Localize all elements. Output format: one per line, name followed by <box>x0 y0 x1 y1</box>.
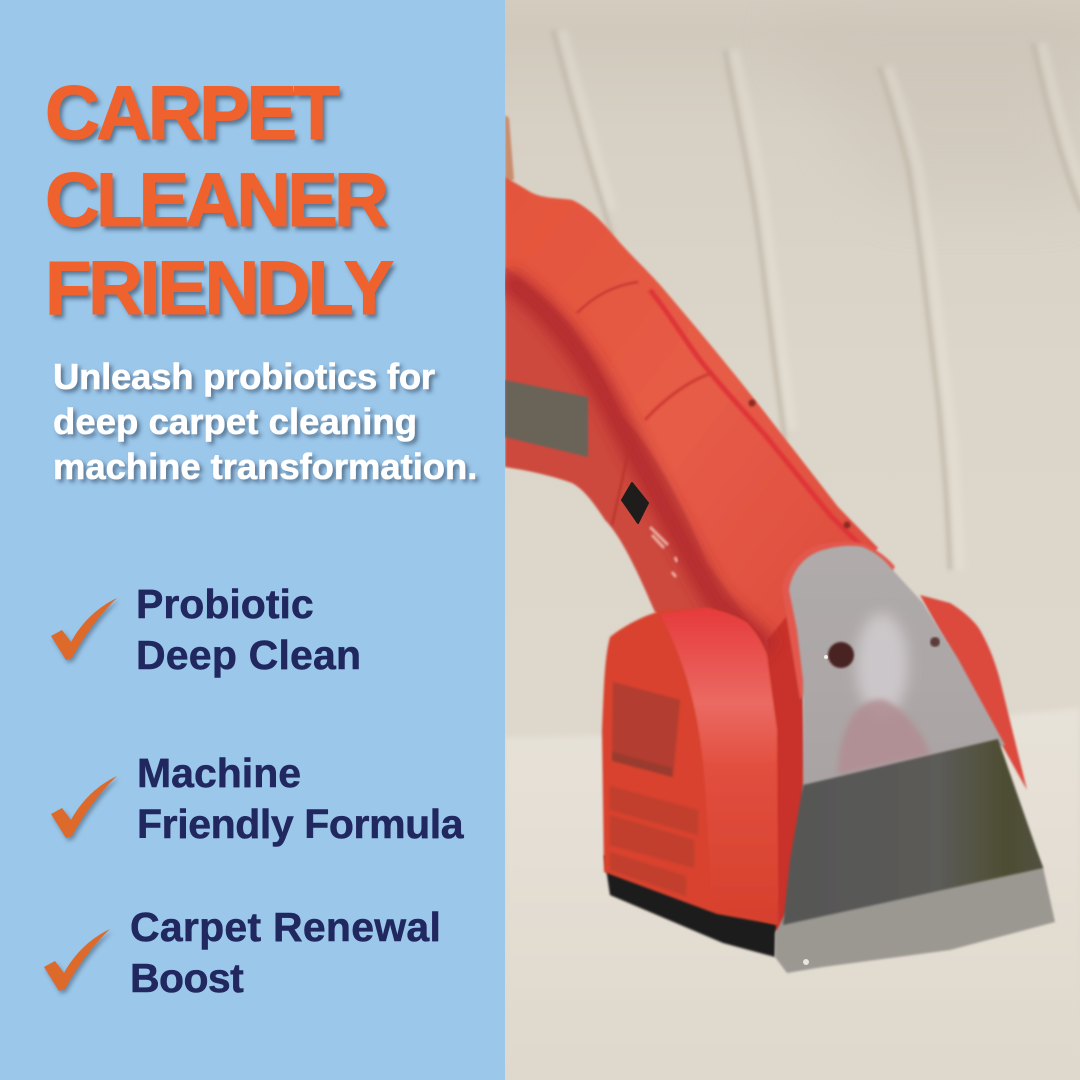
feature text: Boost <box>130 955 243 1001</box>
heading <box>45 71 397 331</box>
nozzle lip <box>775 850 1055 973</box>
clear nozzle dome <box>782 541 1005 795</box>
power button <box>622 483 648 523</box>
feature text <box>136 581 361 678</box>
heading: CLEANER <box>45 158 385 243</box>
feature: Carpet Renewal Boost <box>44 904 441 1001</box>
icon: check mark <box>51 598 118 664</box>
icon: check mark <box>51 776 118 842</box>
dark nozzle plate <box>783 739 1043 925</box>
feature text: Probiotic <box>136 581 314 627</box>
feature text: Carpet Renewal <box>130 904 441 950</box>
foot label <box>610 682 698 896</box>
feature text: Deep Clean <box>136 632 361 678</box>
subheading: Unleash probiotics for <box>53 356 435 397</box>
feature: Machine Friendly Formula <box>51 750 464 847</box>
grey strip on handle <box>505 380 588 457</box>
handle ridge and joints <box>577 282 860 545</box>
handle dark shaded band <box>505 278 770 650</box>
subheading: deep carpet cleaning <box>53 401 417 442</box>
left foot <box>602 608 778 925</box>
feature text <box>137 750 464 847</box>
feature: Probiotic Deep Clean <box>51 581 361 678</box>
heading: CARPET <box>45 71 336 156</box>
handle side vents <box>748 400 850 528</box>
handle small print <box>650 527 677 577</box>
machine handle <box>505 115 878 932</box>
photo: carpet cleaner machine on carpet <box>505 0 1080 1080</box>
heading: FRIENDLY <box>45 246 391 331</box>
carpet background <box>505 0 1080 1080</box>
feature text: Friendly Formula <box>137 801 463 847</box>
subheading: machine transformation. <box>53 446 477 487</box>
black base <box>604 855 777 957</box>
subheading <box>53 356 480 487</box>
feature text: Machine <box>137 750 301 796</box>
icon: check mark <box>44 929 110 996</box>
right foot <box>920 595 1027 790</box>
feature text <box>130 904 441 1001</box>
